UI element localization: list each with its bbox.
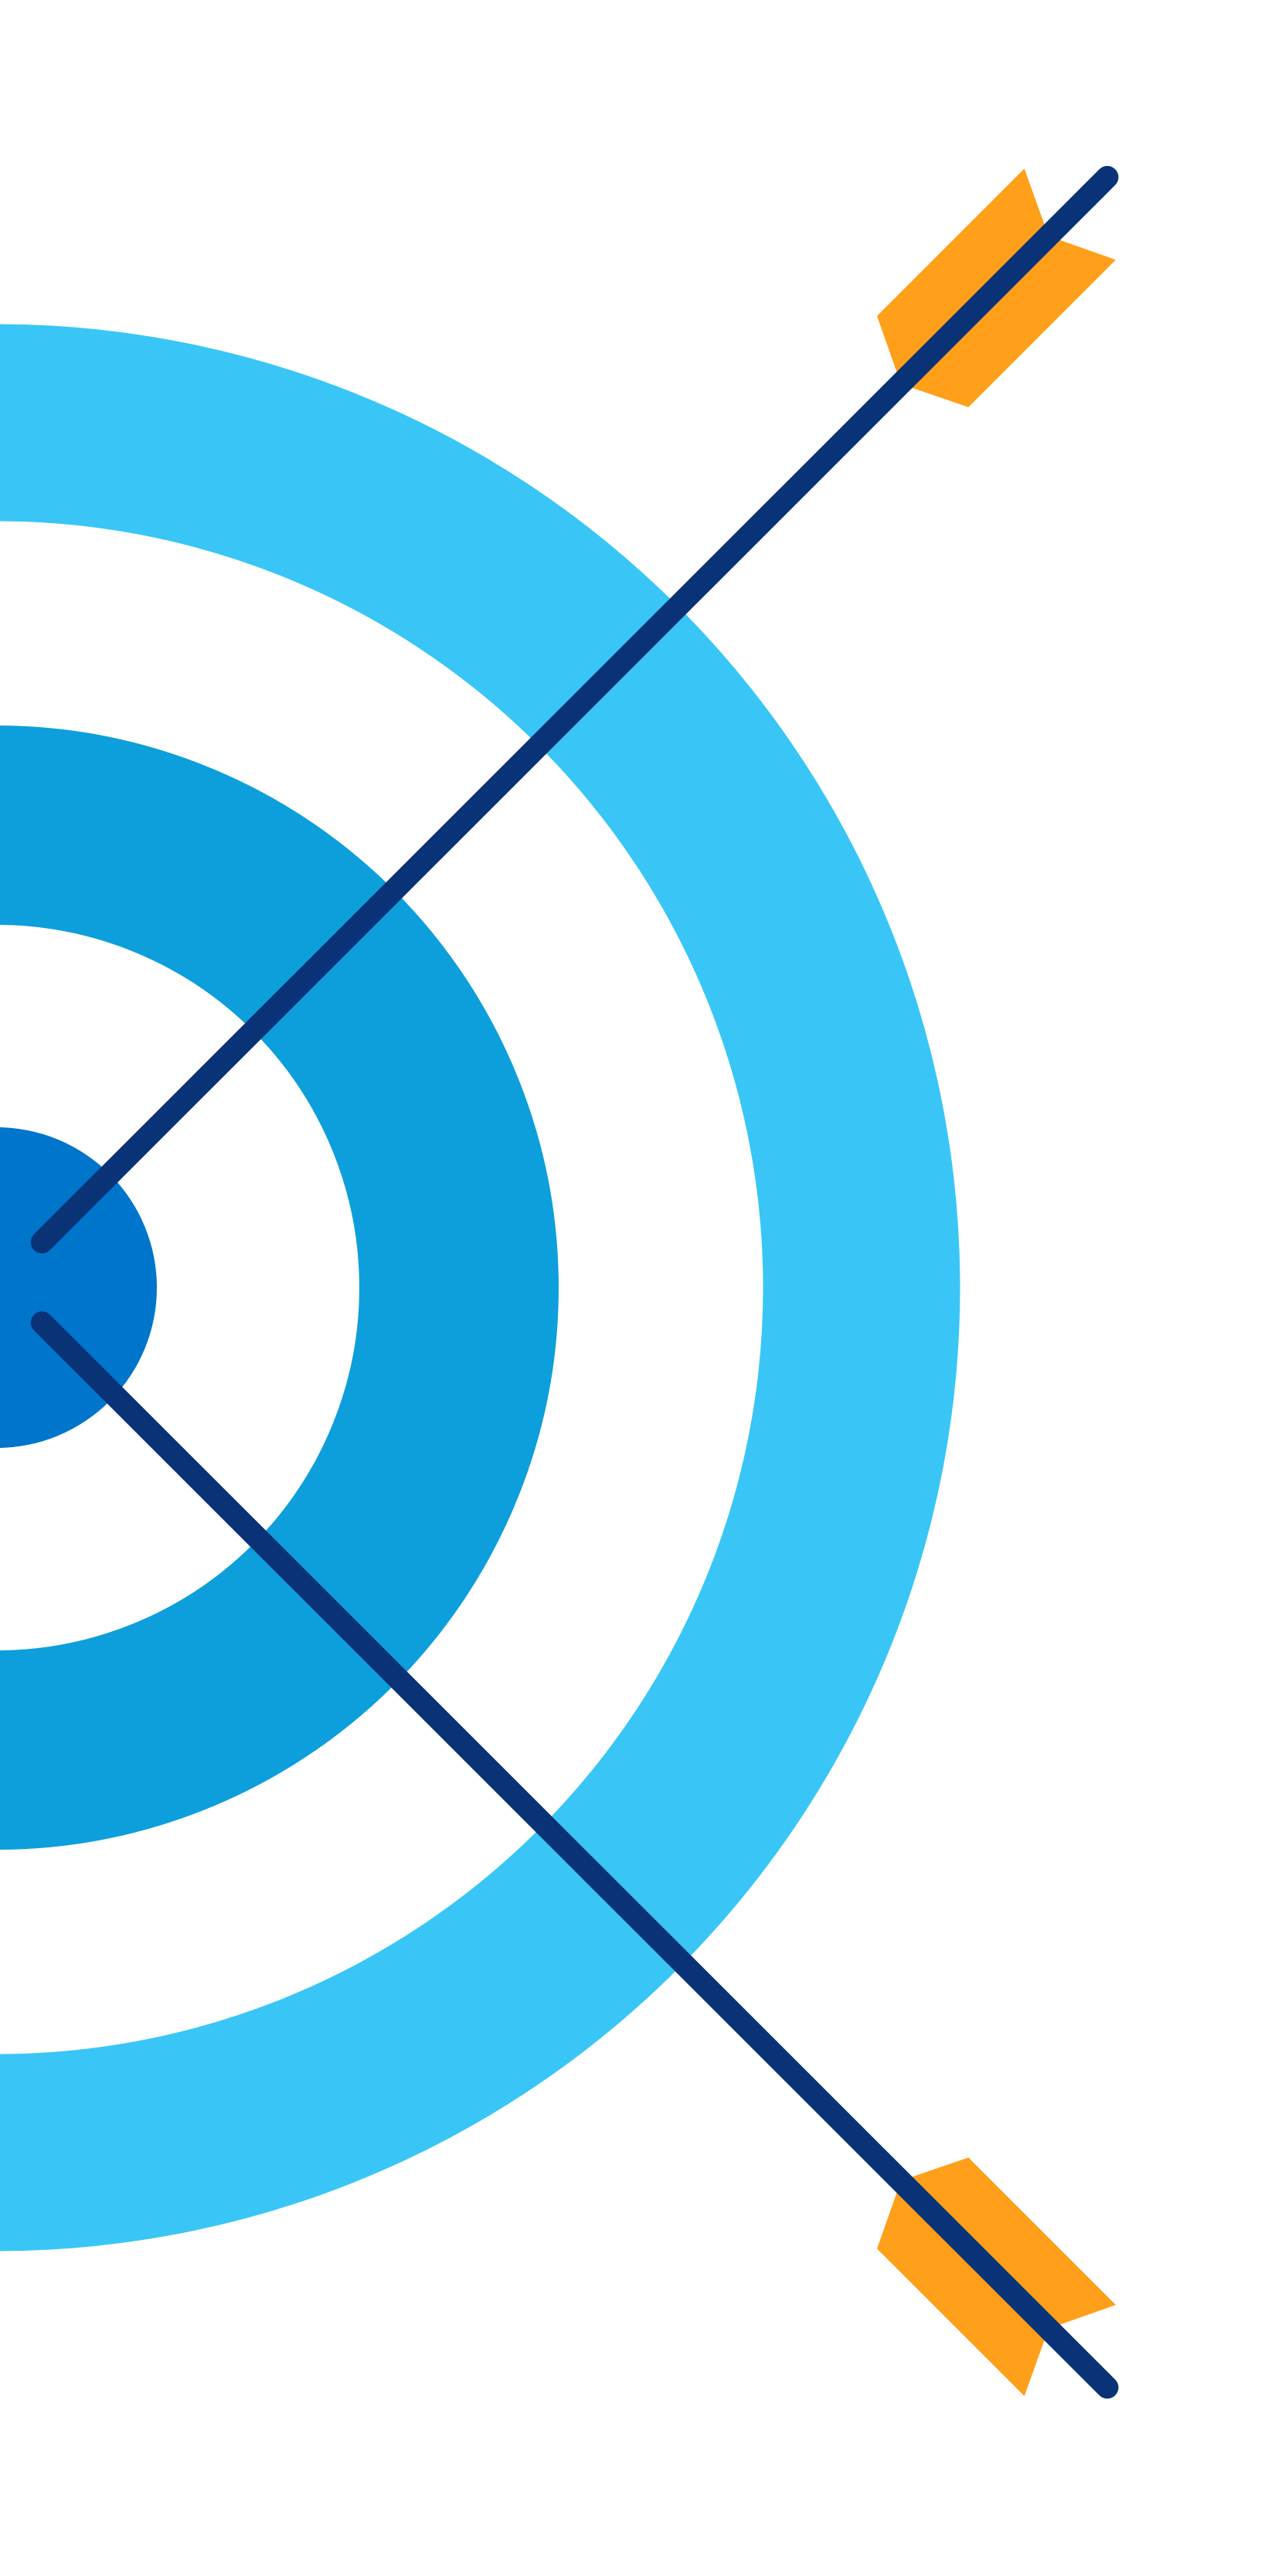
lower arrow shaft xyxy=(42,1323,1107,2387)
bullseye xyxy=(0,1127,157,1448)
lower arrow fletching xyxy=(877,2157,1116,2396)
outer ring xyxy=(0,423,862,2153)
arrow: lower xyxy=(42,1323,1116,2396)
target: concentric rings and bullseye xyxy=(0,423,862,2153)
upper arrow fletching xyxy=(877,168,1116,407)
upper arrow shaft xyxy=(42,177,1107,1242)
arrow: upper xyxy=(42,168,1116,1242)
middle ring xyxy=(0,825,459,1750)
